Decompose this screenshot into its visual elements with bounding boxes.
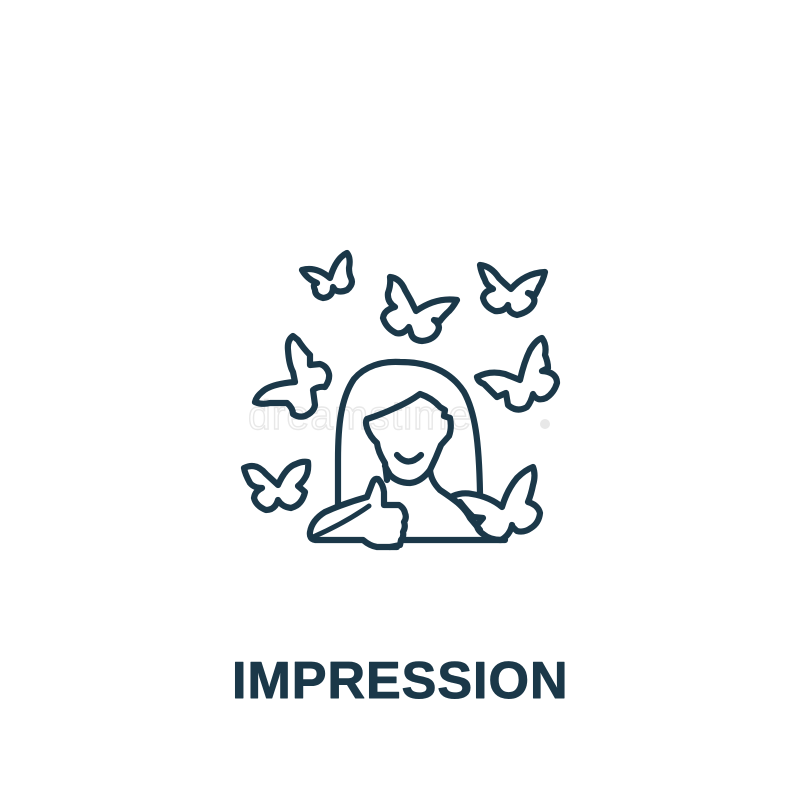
watermark: dreamstime	[248, 392, 472, 438]
hair outline	[338, 362, 480, 505]
title: IMPRESSION	[232, 652, 568, 710]
face and fringe	[366, 394, 451, 483]
icon: woman with butterflies	[244, 253, 557, 547]
butterfly: top small	[302, 253, 352, 298]
hand thumbs up	[367, 479, 406, 547]
butterfly: lower right	[453, 467, 540, 540]
butterfly: top right	[480, 265, 545, 315]
butterfly: right middle	[477, 338, 557, 410]
smile	[397, 455, 421, 462]
sleeve and arm	[310, 497, 397, 547]
butterfly: top centre	[383, 277, 457, 341]
bottom line	[402, 537, 505, 543]
sleeve inner fold	[313, 506, 369, 537]
butterfly: lower left	[244, 462, 308, 510]
butterfly: left middle	[255, 336, 329, 417]
shoulder line	[430, 470, 480, 530]
